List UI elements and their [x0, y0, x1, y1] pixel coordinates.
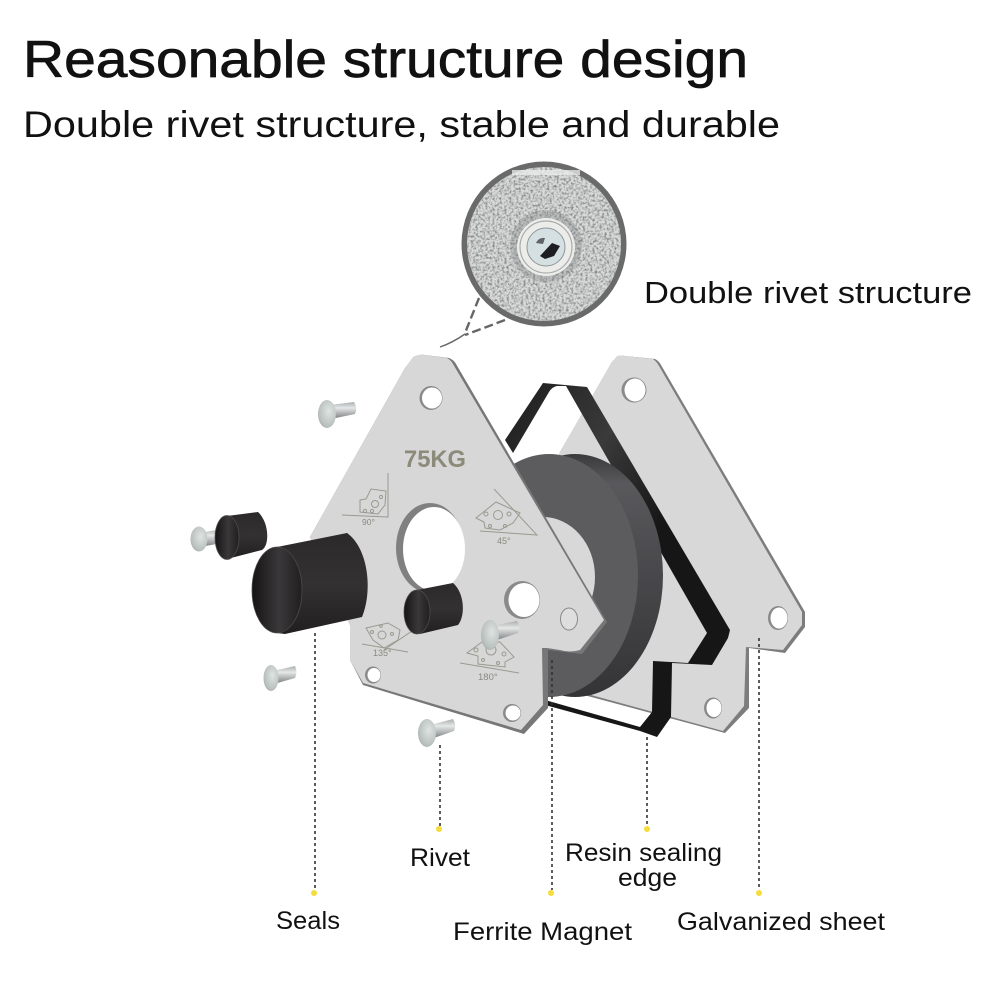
- plate marking: 90 degrees: [342, 473, 388, 527]
- rivet 1: [318, 400, 356, 428]
- seal: small centre: [404, 583, 463, 634]
- leader dots: [311, 826, 762, 896]
- inset: rivet close-up: [462, 162, 626, 326]
- callout dashed pointer: [440, 298, 505, 347]
- seal: small upper: [215, 512, 267, 560]
- inset label: Double rivet structure: [644, 275, 972, 310]
- label: Resin sealing edge: edge: [618, 864, 677, 892]
- label: Seals: Seals: [276, 907, 340, 935]
- front plate holes: [365, 386, 578, 722]
- ferrite magnet: [460, 454, 663, 697]
- label: Resin sealing edge: Resin sealing: [565, 839, 722, 867]
- rivet 2: [190, 526, 222, 552]
- subtitle: Double rivet structure, stable and durable: [23, 104, 780, 145]
- plate marking: 135 degrees: 135°: [373, 648, 392, 658]
- leader lines: [315, 633, 759, 890]
- label: Resin sealing edge: [565, 839, 722, 892]
- rivet 5: [418, 719, 455, 747]
- back galvanized sheet: [520, 356, 805, 733]
- plate marking: 45 degrees: [476, 489, 537, 546]
- rivets: [190, 400, 455, 747]
- plate marking: 75KG: 75KG: [404, 446, 466, 473]
- plate marking: 180 degrees: [460, 642, 519, 683]
- label: Rivet: Rivet: [410, 844, 470, 872]
- plate marking: 90 degrees: 90°: [362, 517, 375, 527]
- front plate: [310, 355, 607, 734]
- plate marking: 135 degrees: [362, 623, 412, 658]
- rivet on plate: [481, 620, 519, 650]
- seal: large: [252, 533, 368, 634]
- label: Ferrite Magnet: Ferrite Magnet: [453, 918, 632, 946]
- plate marking: 45 degrees: 45°: [497, 536, 511, 546]
- plate marking: 180 degrees: 180°: [478, 672, 498, 683]
- rivet 3: [264, 665, 296, 691]
- resin sealing edge ring: [505, 383, 730, 737]
- label: Galvanized sheet: Galvanized sheet: [677, 908, 885, 936]
- title: Reasonable structure design: [23, 31, 748, 89]
